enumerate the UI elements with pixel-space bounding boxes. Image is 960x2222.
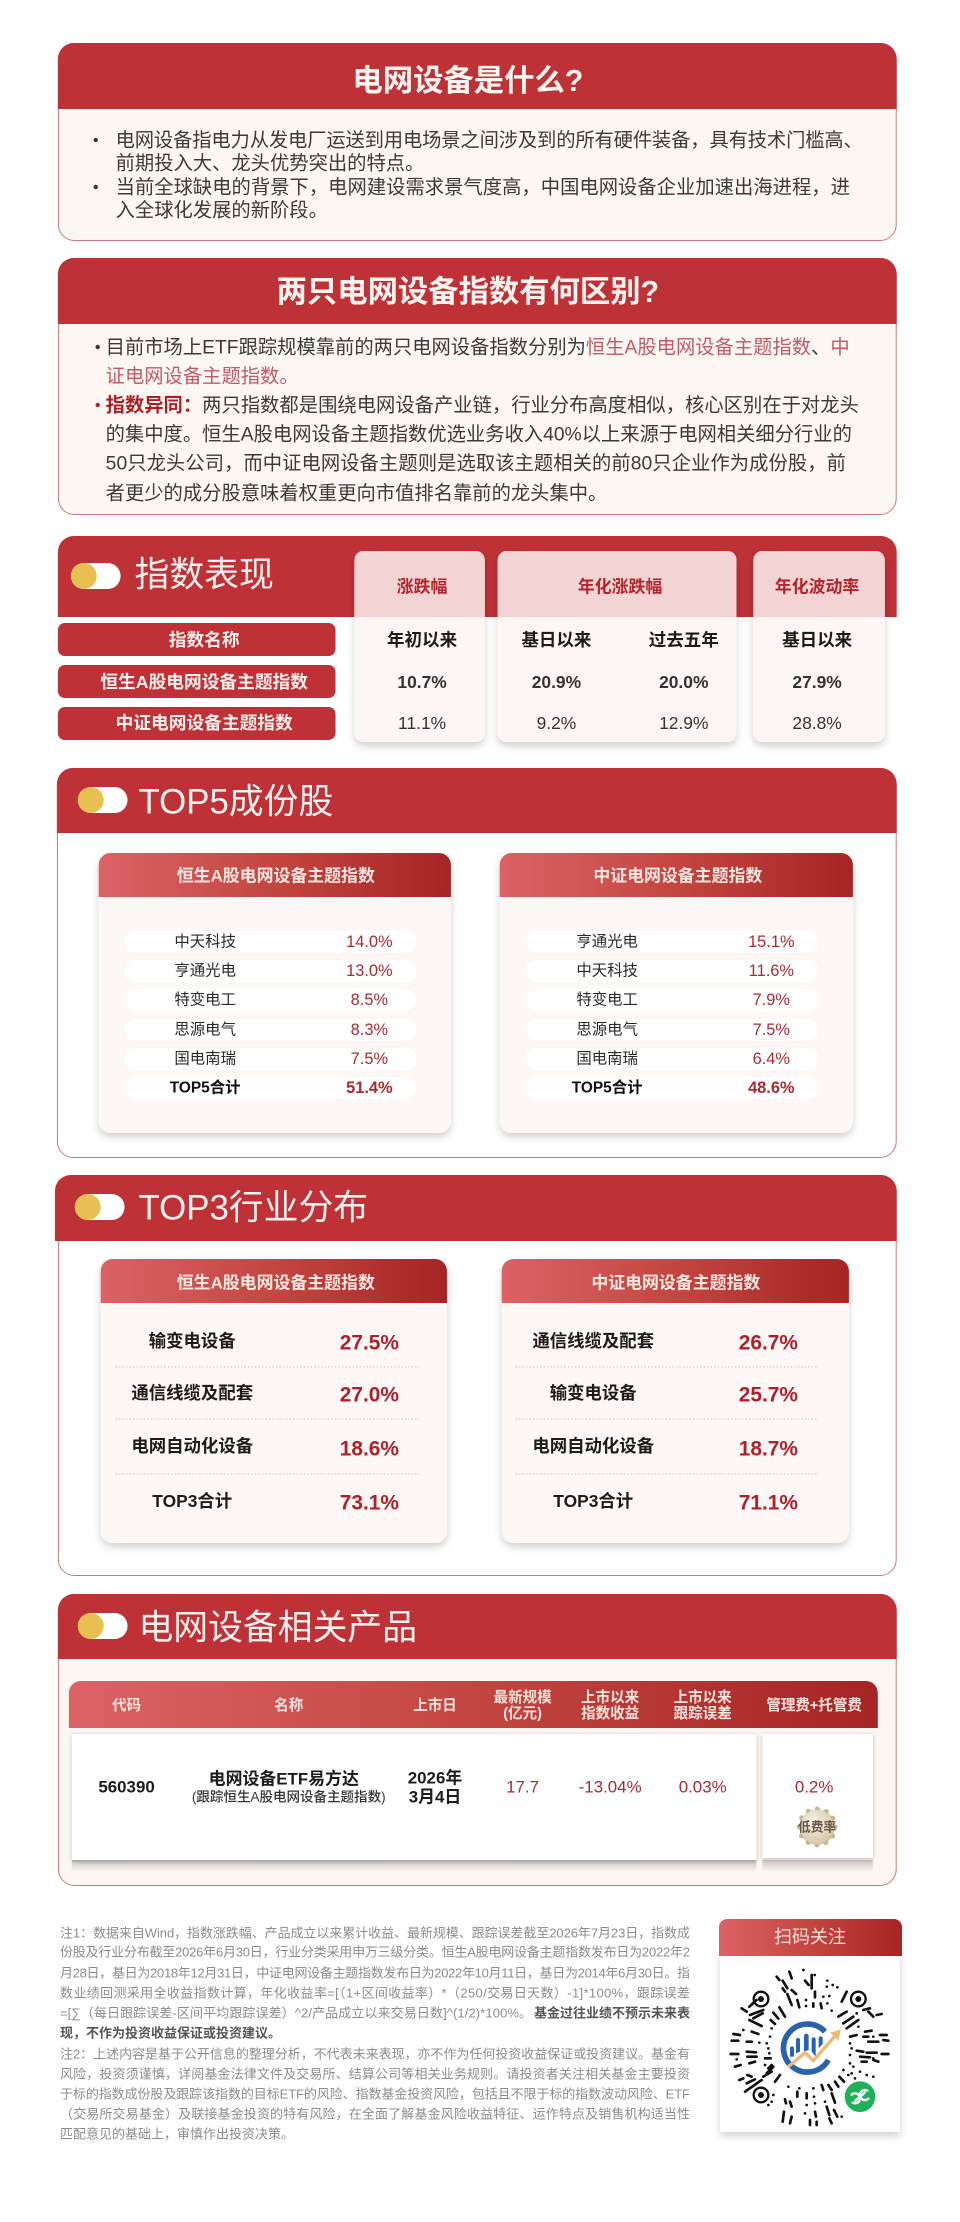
icon: mini program mark xyxy=(845,2081,875,2112)
card: Hang Seng A-share index top 5: 恒生A股电网设备主题指数 xyxy=(177,865,375,886)
column: annualized change: 9.2% xyxy=(537,713,576,733)
icon: toggle pill xyxy=(78,1613,128,1639)
panel: related products xyxy=(58,1594,897,1886)
text block: footnotes: （交易所交易基金）及联接基金投资的特有风险，在全面了解基金风险收益特征、运作特点及销售机构适当性 xyxy=(60,2106,690,2122)
card: CSI index top 5: 7.5% xyxy=(753,1021,790,1039)
card: Hang Seng A-share index top 5: 7.5% xyxy=(351,1050,388,1068)
text block: index comparison: 指数异同： xyxy=(106,395,202,417)
card: Hang Seng A-share index top 5: 中天科技 xyxy=(174,932,236,951)
card: Hang Seng A-share index top 5: 14.0% xyxy=(346,933,393,951)
table row: product: 560390 xyxy=(98,1777,155,1797)
column: change: 涨跌幅 xyxy=(397,577,447,597)
card: CSI index top 5: 中证电网设备主题指数 xyxy=(593,865,762,886)
table header: 上市以来 xyxy=(581,1688,640,1706)
card: CSI index top 5: 特变电工 xyxy=(576,990,638,1009)
card: Hang Seng A-share index top 5: 国电南瑞 xyxy=(174,1049,236,1068)
column: change: 年初以来 xyxy=(387,630,458,650)
table header: 最新规模 xyxy=(494,1688,552,1706)
column: change: 11.1% xyxy=(398,713,446,733)
column: annualized change: 过去五年 xyxy=(649,630,719,650)
column: change xyxy=(354,551,485,742)
text block: footnotes: 于标的指数成份股及跟踪该指数的目标ETF的风险、指数基金投资风险，包括且不限于标的指数波动风险、ETF xyxy=(60,2086,690,2102)
card: CSI index top 3 xyxy=(502,1259,849,1543)
row labels xyxy=(58,623,336,740)
card: CSI index top 3: 25.7% xyxy=(739,1383,798,1407)
text block: footnotes: =[∑（每日跟踪误差-区间平均跟踪误差）^2/产品成立以来交易日数]^(1/2)*100%。 xyxy=(60,2006,532,2020)
card: Hang Seng A-share index top 5: 51.4% xyxy=(346,1079,393,1097)
card: Hang Seng A-share index top 3: 通信线缆及配套 xyxy=(131,1383,254,1403)
column: annualized change: 12.9% xyxy=(659,713,708,733)
card: CSI index top 5: 国电南瑞 xyxy=(576,1049,638,1068)
card: Hang Seng A-share index top 3: TOP3合计 xyxy=(152,1491,232,1511)
table header: 代码 xyxy=(112,1697,141,1714)
text block: footnotes: 数业绩回测采用全收益指数计算，年化收益率=[（1+区间收益率）*（250/交易日天数）-1]*100%，跟踪误差 xyxy=(60,1986,690,2000)
card: CSI index top 3: TOP3合计 xyxy=(553,1491,633,1511)
table row: product: 0.03% xyxy=(679,1777,727,1797)
column: annualized volatility xyxy=(753,551,885,742)
card: Hang Seng A-share index top 3: 电网自动化设备 xyxy=(131,1436,254,1456)
text block: index comparison: 证电网设备主题指数。 xyxy=(106,366,299,388)
column: annualized change: 基日以来 xyxy=(521,630,592,650)
text block: definition bullets: 前期投入大、龙头优势突出的特点。 xyxy=(116,153,424,175)
card: Hang Seng A-share index top 5 xyxy=(99,853,451,1133)
card: Hang Seng A-share index top 3: 输变电设备 xyxy=(149,1331,236,1351)
column: annualized volatility: 28.8% xyxy=(792,713,842,733)
icon: toggle pill xyxy=(75,1194,125,1220)
table header: 名称 xyxy=(274,1696,304,1714)
card: CSI index top 3: 中证电网设备主题指数 xyxy=(591,1272,760,1293)
panel: top 3 industries xyxy=(55,1175,897,1576)
table row: product: 2026年 xyxy=(408,1767,462,1788)
text block: footnotes: 匹配意见的基础上，审慎作出投资决策。 xyxy=(60,2126,294,2142)
text block: footnotes: 现，不作为投资收益保证或投资建议。 xyxy=(60,2026,281,2040)
card: CSI index top 3: 26.7% xyxy=(739,1331,798,1355)
column: annualized change: 20.0% xyxy=(659,672,709,692)
table row: product xyxy=(72,1734,756,1872)
column: annualized volatility: 基日以来 xyxy=(782,630,853,650)
table row: product: 3月4日 xyxy=(409,1787,461,1807)
card: CSI index top 3: 通信线缆及配套 xyxy=(532,1331,655,1351)
table header: (亿元) xyxy=(503,1705,542,1722)
column: annualized change: 年化涨跌幅 xyxy=(578,576,662,597)
card: CSI index top 5: 中天科技 xyxy=(576,961,638,980)
column: annualized volatility: 27.9% xyxy=(792,672,842,692)
card: Hang Seng A-share index top 3: 27.5% xyxy=(340,1331,399,1355)
heading: scan to follow: 扫码关注 xyxy=(774,1927,846,1947)
heading: related products: 电网设备相关产品 xyxy=(139,1608,417,1648)
table header xyxy=(69,1681,878,1728)
text block: index comparison: 者更少的成分股意味着权重更向市值排名靠前的龙头集中。 xyxy=(106,483,607,505)
row labels: 中证电网设备主题指数 xyxy=(116,713,293,733)
main content panels xyxy=(55,43,897,1886)
icon: logo xyxy=(783,2024,841,2072)
panel: what is grid equipment xyxy=(58,43,897,240)
icon: toggle pill xyxy=(78,787,128,813)
column: annualized volatility: 年化波动率 xyxy=(775,576,859,597)
card: Hang Seng A-share index top 5: 8.3% xyxy=(351,1021,388,1039)
text block: index comparison: 两只指数都是围绕电网设备产业链，行业分布高度相似，核心区别在于对龙头 xyxy=(202,395,859,417)
table row: product: (跟踪恒生A股电网设备主题指数) xyxy=(192,1788,386,1805)
icon: low fee badge: 低费率 xyxy=(798,1819,836,1835)
card: Hang Seng A-share index top 3 xyxy=(101,1259,447,1543)
panel: difference between two indices xyxy=(58,258,897,514)
table row: product: -13.04% xyxy=(579,1777,642,1797)
card: Hang Seng A-share index top 5: 思源电气 xyxy=(174,1020,236,1039)
card: Hang Seng A-share index top 3: 27.0% xyxy=(340,1383,399,1407)
text block: footnotes: 月28日，基日为2018年12月31日，中证电网设备主题指数发布日为2022年10月11日，基日为2014年6月30日。指 xyxy=(60,1966,690,1980)
card: Hang Seng A-share index top 3: 73.1% xyxy=(340,1491,399,1515)
row labels: 恒生A股电网设备主题指数 xyxy=(100,672,308,692)
card: CSI index top 3: 输变电设备 xyxy=(550,1383,637,1403)
column: annualized change: 20.9% xyxy=(532,672,582,692)
heading: top 5 constituents: TOP5成份股 xyxy=(139,782,333,822)
card: Hang Seng A-share index top 5: 特变电工 xyxy=(174,990,236,1009)
table header: 上市以来 xyxy=(674,1688,732,1706)
heading: what is grid equipment: 电网设备是什么? xyxy=(352,64,583,98)
icon: mini-program code xyxy=(731,1970,888,2125)
card: CSI index top 5 xyxy=(500,853,853,1133)
text block: footnotes: 份股及行业分布截至2026年6月30日，行业分类采用申万三级分类。恒生A股电网设备主题指数发布日为2022年2 xyxy=(60,1944,690,1960)
text block: definition bullets xyxy=(94,130,863,222)
table cell: fee: 0.2% xyxy=(795,1777,833,1797)
row labels: 指数名称 xyxy=(169,630,240,650)
text block: definition bullets: 入全球化发展的新阶段。 xyxy=(116,200,328,222)
text block: index comparison xyxy=(96,337,859,505)
text block: footnotes: 注2：上述内容是基于公开信息的整理分析，不代表未来表现，亦不作为任何投资收益保证或投资建议。基金有 xyxy=(60,2046,690,2062)
panel: top 5 constituents xyxy=(57,768,897,1158)
card: Hang Seng A-share index top 5: TOP5合计 xyxy=(170,1077,241,1097)
card: Hang Seng A-share index top 5: 13.0% xyxy=(346,962,393,980)
card: CSI index top 5: 6.4% xyxy=(753,1050,790,1068)
table header: 上市日 xyxy=(413,1696,457,1714)
table header: 管理费+托管费 xyxy=(766,1696,862,1714)
text block: footnotes: 注1：数据来自Wind，指数涨跌幅、产品成立以来累计收益、最新规模、跟踪误差截至2026年7月23日，指数成 xyxy=(60,1926,690,1940)
heading: difference between two indices: 两只电网设备指数有何区别? xyxy=(277,275,659,309)
card: Hang Seng A-share index top 5: 亨通光电 xyxy=(174,961,236,980)
text block: index comparison: 50只龙头公司，而中证电网设备主题则是选取该主题相关的前80只企业作为成份股，前 xyxy=(106,453,846,475)
card: Hang Seng A-share index top 3: 18.6% xyxy=(340,1437,399,1461)
text block: definition bullets: 当前全球缺电的背景下，电网建设需求景气度高，中国电网设备企业加速出海进程，进 xyxy=(116,177,850,199)
card: CSI index top 5: 15.1% xyxy=(748,933,795,951)
text block: footnotes xyxy=(60,1926,690,2142)
panel: scan to follow xyxy=(719,1919,902,2132)
table header: 指数收益 xyxy=(581,1704,639,1722)
card: CSI index top 3: 电网自动化设备 xyxy=(532,1436,655,1456)
table cell: fee xyxy=(762,1734,873,1872)
table header: 跟踪误差 xyxy=(674,1704,732,1722)
card: CSI index top 5: 亨通光电 xyxy=(576,932,638,951)
text block: definition bullets: 电网设备指电力从发电厂运送到用电场景之间涉及到的所有硬件装备，具有技术门槛高、 xyxy=(116,130,863,152)
card: CSI index top 3: 71.1% xyxy=(739,1491,798,1515)
table row: product: 电网设备ETF易方达 xyxy=(209,1768,359,1789)
column: annualized change xyxy=(498,551,736,742)
panel: index performance xyxy=(58,536,897,742)
card: CSI index top 5: TOP5合计 xyxy=(572,1077,643,1097)
card: Hang Seng A-share index top 5: 8.5% xyxy=(351,991,388,1009)
card: CSI index top 5: 思源电气 xyxy=(576,1020,638,1039)
card: CSI index top 3: 18.7% xyxy=(739,1437,798,1461)
card: CSI index top 5: 7.9% xyxy=(753,991,790,1009)
table row: product: 17.7 xyxy=(506,1777,539,1797)
column: change: 10.7% xyxy=(397,672,447,692)
text block: footnotes: 基金过往业绩不预示未来表 xyxy=(534,2006,690,2020)
card: CSI index top 5: 11.6% xyxy=(749,962,794,980)
heading: index performance: 指数表现 xyxy=(135,555,274,595)
icon: toggle pill xyxy=(71,563,121,589)
text block: footnotes: 风险，投资须谨慎，详阅基金法律文件及交易所、结算公司等相关业务规则。请投资者关注相关基金主要投资 xyxy=(60,2066,690,2082)
card: CSI index top 5: 48.6% xyxy=(748,1079,795,1097)
card: Hang Seng A-share index top 3: 恒生A股电网设备主题指数 xyxy=(177,1272,375,1293)
heading: top 3 industries: TOP3行业分布 xyxy=(139,1188,368,1228)
text block: index comparison: 的集中度。恒生A股电网设备主题指数优选业务收入40%以上来源于电网相关细分行业的 xyxy=(106,424,852,446)
text block: index comparison: 目前市场上ETF跟踪规模靠前的两只电网设备指数分别为恒生A股电网设备主题指数、中 xyxy=(106,337,850,359)
